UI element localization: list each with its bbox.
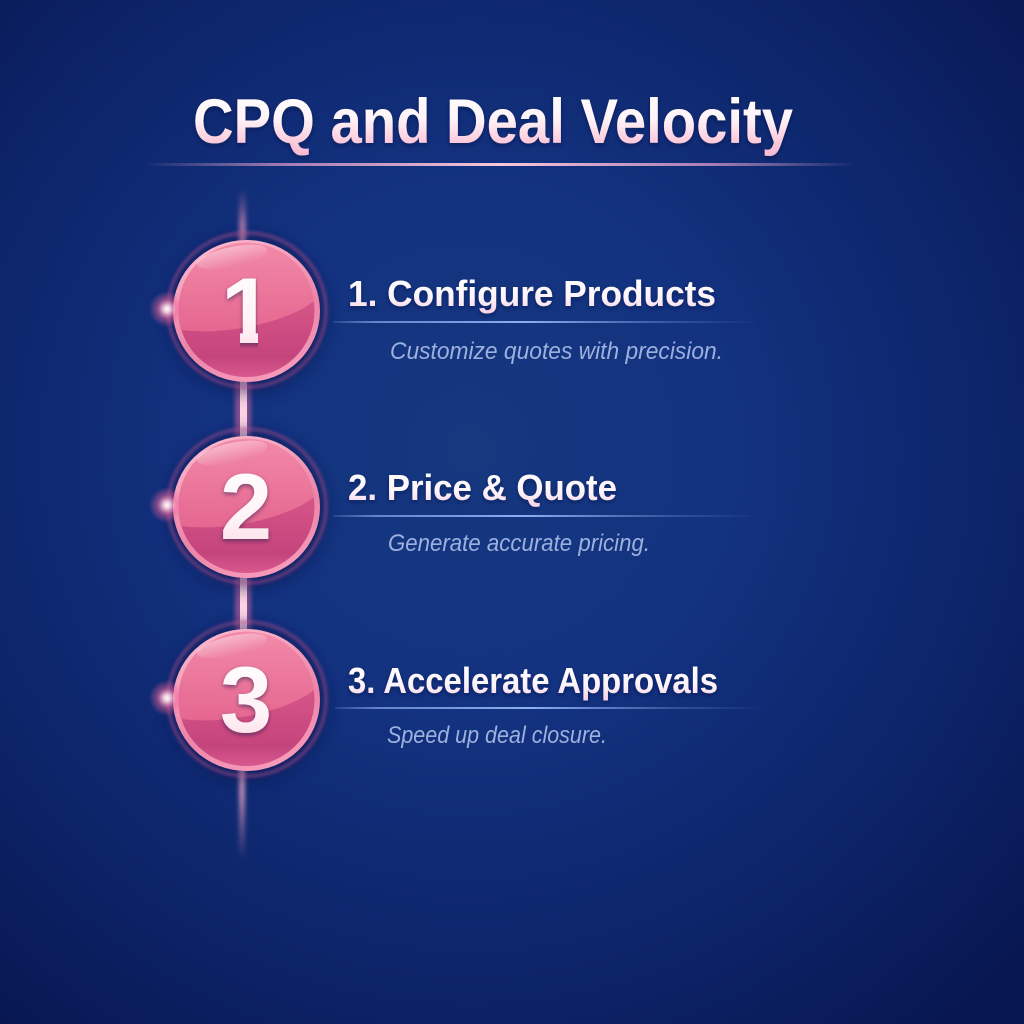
step 1 divider [333, 321, 758, 323]
step 2 description: Generate accurate pricing. [388, 530, 650, 557]
number 3: 3 [220, 647, 272, 752]
timeline connector [235, 190, 251, 860]
step 3 heading: 3. Accelerate Approvals [348, 660, 718, 701]
number 2: 2 [220, 454, 272, 559]
step 2 badge [149, 429, 328, 590]
step 3 description: Speed up deal closure. [387, 722, 607, 749]
step 1 badge [149, 233, 328, 394]
number 1: 1 [221, 258, 273, 363]
step 2 divider [333, 515, 758, 517]
step 1 description: Customize quotes with precision. [390, 338, 723, 365]
step 2 heading: 2. Price & Quote [348, 467, 617, 508]
step 3 badge [149, 622, 328, 783]
step 1 heading: 1. Configure Products [348, 273, 716, 314]
title underline [145, 163, 855, 166]
step 3 divider [335, 707, 765, 709]
title: CPQ and Deal Velocity [193, 87, 793, 157]
